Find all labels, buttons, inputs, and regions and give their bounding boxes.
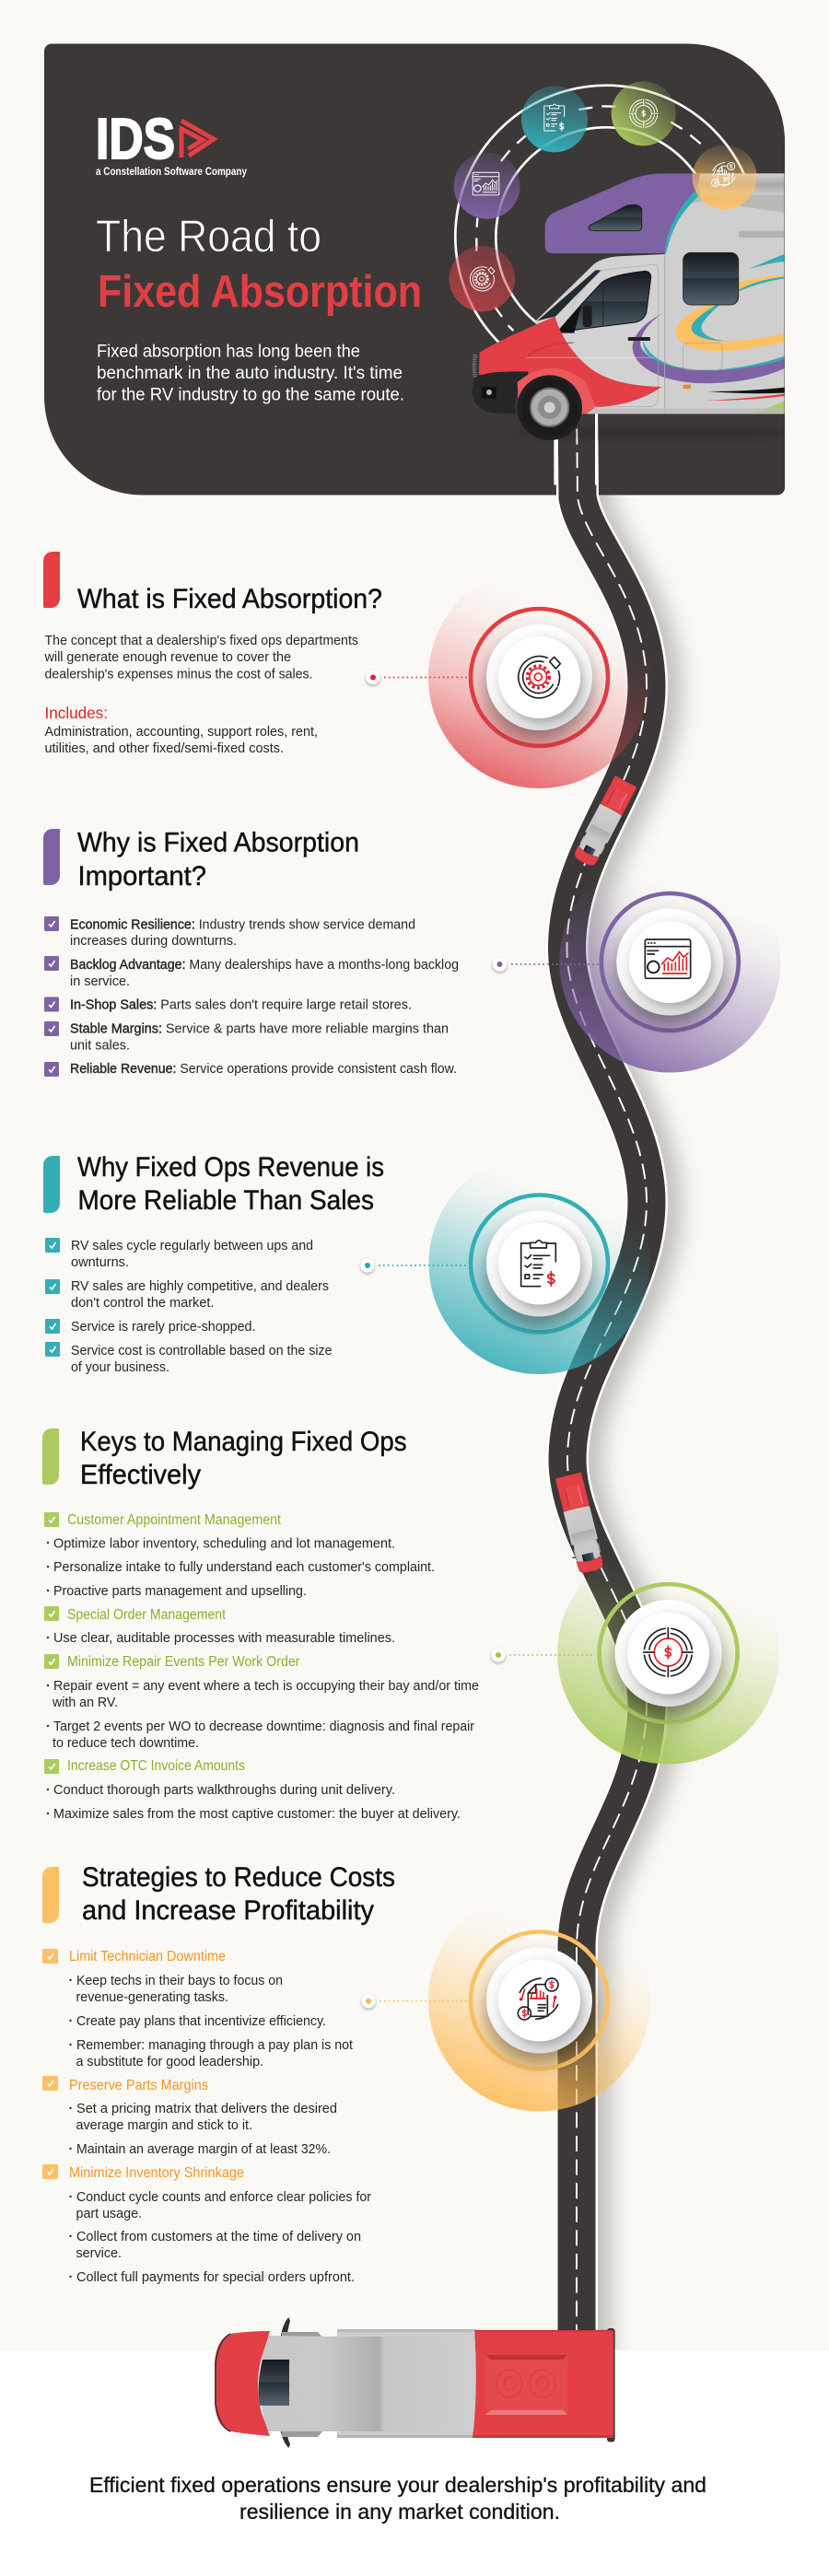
section 5 list: Maintain an average margin of at least 32%. (76, 2141, 331, 2157)
section 3 checklist: of your business. (71, 1359, 169, 1375)
section 3 checklist: ownturns. (71, 1254, 129, 1270)
section 5 heading: and Increase Profitability (82, 1895, 374, 1926)
section 1 circle with icon (428, 566, 650, 788)
icon: financial report (518, 1978, 558, 2020)
section 4 list: Maximize sales from the most captive customer: the buyer at delivery. (53, 1806, 461, 1822)
section 4 list: Conduct thorough parts walkthroughs during unit delivery. (53, 1782, 395, 1798)
section 2 checklist: Stable Margins: Service & parts have more reliable margins than (70, 1021, 449, 1037)
hero description: benchmark in the auto industry. It's time (97, 364, 403, 383)
icon: dollar target (644, 1627, 693, 1677)
section 5 list: Preserve Parts Margins (69, 2078, 208, 2093)
section 5 list: Collect from customers at the time of delivery on (76, 2229, 361, 2244)
section 3 circle with icon (429, 1153, 650, 1374)
bubble icon: dashboard (473, 172, 499, 195)
bubble icon: target (629, 99, 658, 128)
section 3 connector (360, 1258, 469, 1273)
section 3 heading: More Reliable Than Sales (77, 1185, 374, 1216)
closing statement (89, 2473, 706, 2524)
icon: dashboard chart (645, 939, 691, 978)
road truck 2 (553, 1472, 607, 1575)
section 4 circle with icon (557, 1542, 779, 1765)
bullet dots (47, 1542, 49, 1814)
section 2 checklist: Backlog Advantage: Many dealerships have a months-long backlog (70, 957, 459, 973)
RV shadow (513, 430, 801, 437)
section 2 checklist: Economic Resilience: Industry trends show service demand (70, 917, 415, 932)
section 5 list: Set a pricing matrix that delivers the desired (76, 2101, 337, 2116)
section 4 list: Use clear, auditable processes with measurable timelines. (53, 1630, 395, 1646)
section 5 heading: Strategies to Reduce Costs (82, 1862, 395, 1893)
section 5 list: a substitute for good leadership. (76, 2054, 263, 2069)
hero description: for the RV industry to go the same route. (97, 386, 404, 405)
RV wheel (517, 375, 582, 440)
road truck 1 (570, 775, 638, 869)
section 5 list: Minimize Inventory Shrinkage (69, 2165, 244, 2181)
section 4 list: Target 2 events per WO to decrease downtime: diagnosis and final repair (53, 1719, 474, 1734)
section 1 heading (43, 552, 382, 614)
section 2 checklist: In-Shop Sales: Parts sales don't require large retail stores. (70, 997, 412, 1013)
section 2 circle with icon (559, 851, 780, 1072)
section 4 list: Optimize labor inventory, scheduling and lot management. (53, 1536, 395, 1552)
bottom truck (215, 2319, 615, 2446)
hero title: The Road to (96, 212, 321, 262)
section 5 list (42, 1949, 371, 2285)
section 2 checklist: Reliable Revenue: Service operations provide consistent cash flow. (70, 1061, 457, 1077)
section 4 list: Customer Appointment Management (67, 1512, 282, 1528)
RV hood (472, 316, 661, 414)
section 2 heading (43, 827, 359, 892)
section 4 list (44, 1512, 479, 1822)
section 4 list: Personalize intake to fully understand each customer's complaint. (53, 1559, 435, 1575)
logo tagline: a Constellation Software Company (96, 165, 247, 178)
section 4 heading: Effectively (80, 1460, 201, 1490)
section 3 checklist (45, 1238, 332, 1375)
ring road (454, 84, 745, 343)
section 2 connector (493, 957, 599, 972)
check icons (44, 1512, 59, 1774)
section 5 list: average margin and stick to it. (76, 2117, 252, 2133)
logo mark (181, 121, 214, 157)
section 5 list: revenue-generating tasks. (76, 1989, 228, 2005)
section 4 list: Special Order Management (67, 1607, 227, 1623)
section 1 body: will generate enough revenue to cover the (44, 649, 291, 665)
section 5 list: service. (76, 2245, 122, 2261)
section 1 body: Includes: (44, 704, 108, 722)
bubble: orange (693, 145, 757, 209)
section 1 connector (366, 670, 469, 684)
section 3 checklist: Service cost is controllable based on the size (71, 1343, 332, 1358)
section 3 checklist: don't control the market. (71, 1295, 214, 1311)
section 5 heading (42, 1862, 395, 1926)
section 3 heading (43, 1152, 384, 1216)
check icons (45, 1238, 60, 1357)
section 5 list: Keep techs in their bays to focus on (76, 1973, 283, 1988)
section 5 list: Remember: managing through a pay plan is not (76, 2037, 354, 2053)
hero description: Fixed absorption has long been the (97, 343, 360, 361)
section 2 heading: Why is Fixed Absorption (77, 827, 359, 858)
section 3 checklist: RV sales are highly competitive, and dealers (71, 1278, 329, 1294)
road shadow (584, 409, 663, 2361)
hero road ring and RV illustration (450, 81, 801, 485)
section 1 heading: What is Fixed Absorption? (77, 584, 382, 614)
bubble: purple (454, 153, 520, 219)
section 3 checklist: Service is rarely price-shopped. (71, 1319, 256, 1335)
section 3 checklist: RV sales cycle regularly between ups and (71, 1238, 313, 1253)
icon: clipboard (521, 1241, 555, 1287)
bullet dots (69, 1979, 72, 2278)
section 4 heading: Keys to Managing Fixed Ops (80, 1427, 407, 1457)
section 4 connector (491, 1648, 595, 1662)
section 4 list: Repair event = any event where a tech is occupying their bay and/or time (53, 1678, 479, 1694)
section 5 list: Collect full payments for special orders upfront. (76, 2269, 355, 2285)
hero title (96, 212, 422, 317)
closing statement: Efficient fixed operations ensure your dealership's profitability and (89, 2473, 706, 2497)
section 5 list: Limit Technician Downtime (69, 1949, 226, 1964)
section 2 checklist: increases during downturns. (70, 933, 237, 949)
bubble: red (450, 246, 515, 311)
section 4 heading (42, 1427, 407, 1490)
section 5 circle with icon (428, 1890, 650, 2111)
panel: hero (44, 44, 785, 495)
footer band (0, 2350, 829, 2576)
section 4 list: Increase OTC Invoice Amounts (67, 1758, 245, 1774)
bubble icon: clipboard (544, 104, 565, 131)
bubble: green (612, 81, 676, 146)
hero logo (96, 108, 247, 178)
section 5 list: Conduct cycle counts and enforce clear policies for (76, 2189, 371, 2205)
section 3 heading: Why Fixed Ops Revenue is (77, 1152, 384, 1183)
check icons (42, 1949, 58, 2179)
section 5 list: Create pay plans that incentivize efficiency. (76, 2013, 326, 2029)
section 2 heading: Important? (77, 861, 206, 892)
section 1 body: utilities, and other fixed/semi-fixed costs. (44, 740, 284, 756)
section 4 list: Proactive parts management and upselling. (53, 1583, 307, 1599)
bubble icon: report (712, 162, 735, 187)
section 5 connector (361, 1994, 469, 2008)
RV body (534, 173, 785, 414)
section 1 body: dealership's expenses minus the cost of sales. (44, 666, 313, 682)
hero description (97, 343, 404, 405)
section 4 list: Minimize Repair Events Per Work Order (67, 1654, 300, 1670)
section 2 checklist (44, 916, 459, 1077)
section 4 list: with an RV. (52, 1695, 118, 1710)
logo wordmark: IDS (96, 108, 175, 171)
section 5 list: part usage. (76, 2206, 142, 2221)
section 2 checklist: in service. (70, 973, 130, 989)
road lines below RV (555, 413, 596, 485)
icon: gear target (519, 657, 560, 698)
section 1 body: The concept that a dealership's fixed ops departments (44, 633, 358, 648)
road (567, 405, 647, 2339)
section 2 checklist: unit sales. (70, 1038, 130, 1054)
hero title: Fixed Absorption (98, 267, 422, 317)
section 1 body: Administration, accounting, support roles, rent, (44, 724, 318, 740)
check icons (44, 916, 59, 1077)
closing statement: resilience in any market condition. (239, 2500, 560, 2524)
bubble: teal (521, 86, 588, 152)
section 1 body (44, 633, 358, 756)
section 4 list: to reduce tech downtime. (53, 1735, 199, 1751)
bubble icon: gear (470, 267, 495, 291)
